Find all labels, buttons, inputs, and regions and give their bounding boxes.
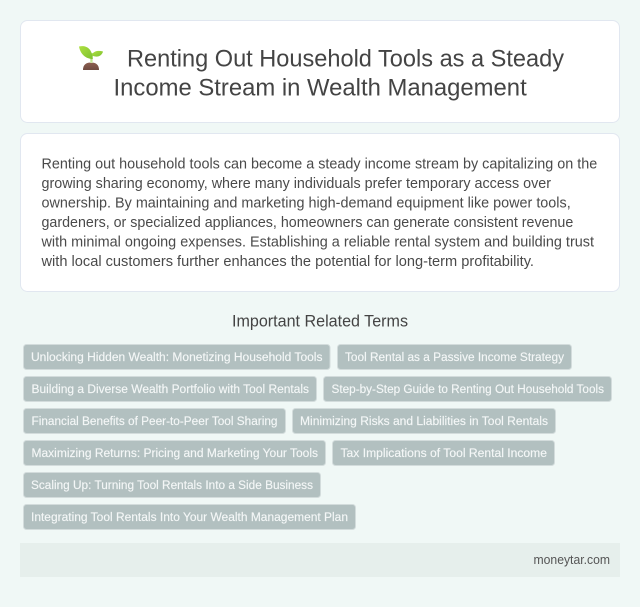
tag: passive income strategy: Tool Rental as a Passive Income Strategy xyxy=(345,350,565,364)
title line 2: Income Stream in Wealth Management xyxy=(114,75,527,102)
tag: step-by-step guide: Step-by-Step Guide to Renting Out Household Tools xyxy=(332,382,604,396)
footer source text: moneytar.com xyxy=(534,553,610,567)
description text: with minimal ongoing expenses. Establishing a reliable rental system and building trust xyxy=(41,234,594,250)
tag: integrating tool rentals xyxy=(24,504,356,530)
panel: description card xyxy=(20,134,620,292)
tag: scaling up xyxy=(24,472,320,498)
title line 1: Renting Out Household Tools as a Steady xyxy=(127,46,564,73)
tag: unlocking hidden wealth: Unlocking Hidden Wealth: Monetizing Household Tools xyxy=(31,350,322,364)
tag: diverse wealth portfolio: Building a Diverse Wealth Portfolio with Tool Rentals xyxy=(32,382,309,396)
tag: maximizing returns xyxy=(24,440,326,466)
tag: unlocking hidden wealth xyxy=(24,344,330,370)
tag: financial benefits: Financial Benefits of Peer-to-Peer Tool Sharing xyxy=(32,414,278,428)
tag: maximizing returns: Maximizing Returns: Pricing and Marketing Your Tools xyxy=(32,446,318,460)
tag: minimizing risks: Minimizing Risks and Liabilities in Tool Rentals xyxy=(300,414,548,428)
description text: growing sharing economy, where many individuals prefer temporary access over xyxy=(42,176,551,192)
panel: title card xyxy=(20,20,620,122)
description text: gardeners, or specialized appliances, homeowners can generate consistent revenue xyxy=(42,215,573,231)
footer bar xyxy=(20,543,620,577)
tag: step-by-step guide xyxy=(324,376,612,402)
tag: financial benefits xyxy=(24,408,286,434)
tag: minimizing risks xyxy=(292,408,556,434)
related terms tags xyxy=(24,344,612,530)
tag: diverse wealth portfolio xyxy=(24,376,316,402)
tag: passive income strategy xyxy=(338,344,572,370)
icon: seedling xyxy=(79,46,103,70)
description text: ownership. By maintaining and marketing high-demand equipment like power tools, xyxy=(42,195,571,211)
tag: integrating tool rentals: Integrating Tool Rentals Into Your Wealth Management Plan xyxy=(31,510,348,524)
description text: Renting out household tools can become a steady income stream by capitalizing on the xyxy=(42,156,597,172)
description text: with local customers further enhances the potential for long-term profitability. xyxy=(41,254,534,270)
tag: tax implications: Tax Implications of Tool Rental Income xyxy=(340,446,547,460)
tag: tax implications xyxy=(332,440,554,466)
heading: related terms: Important Related Terms xyxy=(232,312,408,330)
tag: scaling up: Scaling Up: Turning Tool Rentals Into a Side Business xyxy=(31,478,313,492)
description text xyxy=(41,156,597,270)
